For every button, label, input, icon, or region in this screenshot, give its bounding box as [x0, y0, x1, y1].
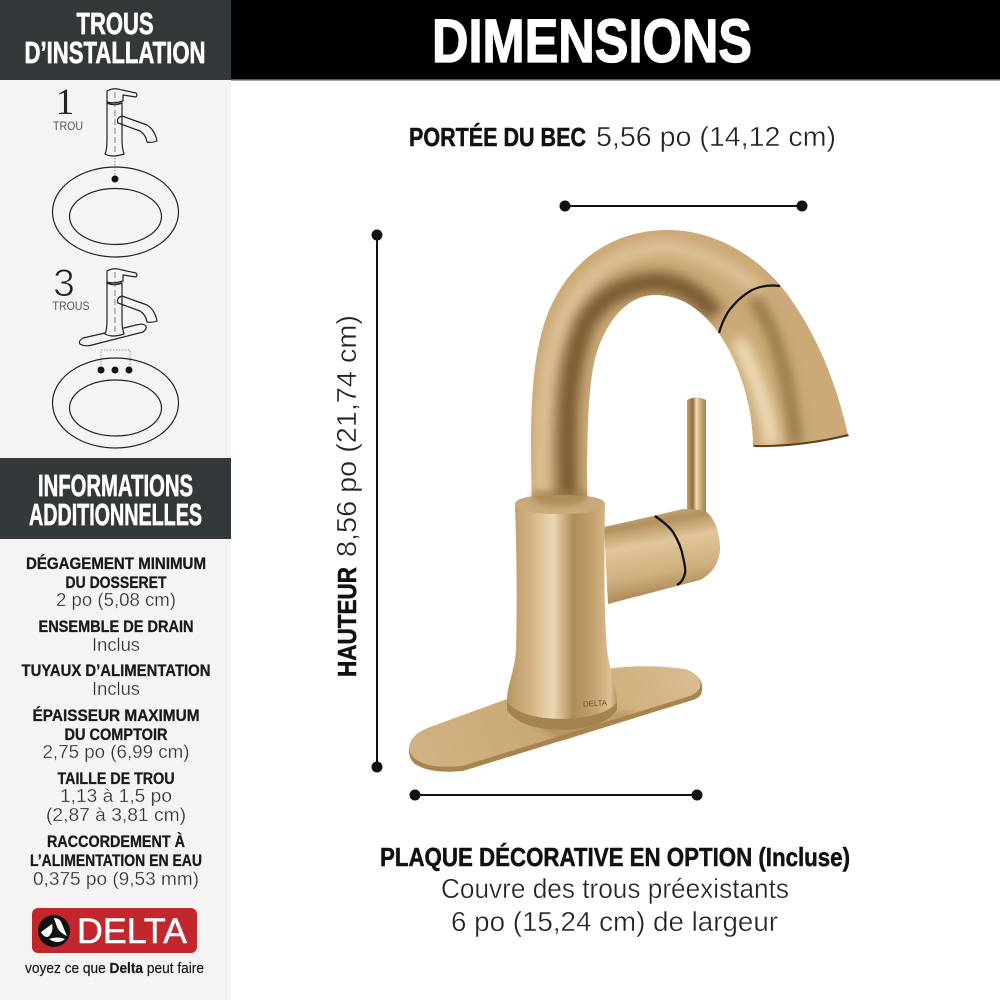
logo: Delta: DELTA	[77, 912, 188, 951]
text block: additional specifications: DU DOSSERET	[66, 574, 166, 592]
faucet: lever handle	[687, 398, 706, 518]
text block: additional specifications: DÉGAGEMENT MINIMUM	[26, 554, 206, 573]
heading: trous d'installation: TROUS	[76, 6, 154, 41]
text block: additional specifications: RACCORDEMENT À	[47, 832, 185, 851]
dimension line: deck plate width	[410, 790, 702, 800]
text block: additional specifications: Inclus	[92, 679, 140, 699]
illustration: faucet	[409, 230, 849, 772]
heading: dimensions banner	[231, 0, 1000, 80]
icon: three-hole installation: 3	[53, 262, 75, 305]
text: deck plate caption	[380, 842, 850, 937]
logo: Delta: voyez ce que Delta peut faire	[25, 961, 204, 977]
text block: additional specifications: 2 po (5,08 cm)	[56, 590, 176, 610]
text: height: 8,56 po (21,74 cm)	[331, 315, 362, 557]
heading: dimensions banner: DIMENSIONS	[432, 7, 752, 75]
logo: Delta	[25, 908, 204, 977]
text: spout reach: 5,56 po (14,12 cm)	[596, 121, 836, 152]
panel: left sidebar	[0, 0, 231, 1000]
icon: three-hole installation	[52, 262, 178, 448]
text block: additional specifications: ÉPAISSEUR MAXIMUM	[32, 706, 200, 725]
heading: informations additionnelles	[0, 458, 231, 539]
icon: one-hole installation: 1	[56, 82, 74, 123]
text: height: HAUTEUR	[332, 567, 362, 677]
heading: informations additionnelles: INFORMATIONS	[38, 468, 193, 503]
faucet: deck plate	[409, 666, 702, 772]
text block: additional specifications	[22, 554, 210, 889]
text: spout reach: PORTÉE DU BEC	[409, 122, 586, 152]
heading: trous d'installation	[0, 0, 231, 80]
text block: additional specifications: (2,87 à 3,81 cm)	[46, 805, 186, 825]
text: deck plate caption: Couvre des trous préexistants	[441, 873, 789, 904]
dimension line: height	[372, 230, 382, 772]
text: deck plate caption: 6 po (15,24 cm) de largeur	[451, 906, 778, 937]
text: spout reach	[409, 121, 836, 152]
text block: additional specifications: 0,375 po (9,53 mm)	[33, 869, 199, 889]
dimension line: spout reach	[560, 200, 808, 212]
text block: additional specifications: Inclus	[92, 635, 140, 655]
icon: three-hole installation: TROUS	[52, 299, 90, 313]
heading: trous d'installation: D’INSTALLATION	[24, 35, 206, 70]
text block: additional specifications: L’ALIMENTATION EN EAU	[30, 852, 202, 870]
text block: additional specifications: 2,75 po (6,99 cm)	[42, 742, 190, 762]
faucet: spout	[531, 230, 849, 505]
faucet: body	[507, 490, 617, 730]
text block: additional specifications: TUYAUX D’ALIMENTATION	[22, 662, 210, 680]
heading: informations additionnelles: ADDITIONNELLES	[29, 497, 202, 532]
faucet: brand mark: DELTA	[583, 698, 608, 709]
text: height	[331, 315, 362, 677]
text block: additional specifications: DU COMPTOIR	[64, 726, 168, 744]
text: deck plate caption: PLAQUE DÉCORATIVE EN OPTION (Incluse)	[380, 842, 850, 872]
text block: additional specifications: TAILLE DE TROU	[58, 770, 174, 788]
text block: additional specifications: 1,13 à 1,5 po	[60, 786, 172, 806]
text block: additional specifications: ENSEMBLE DE DRAIN	[38, 618, 194, 636]
faucet: handle cylinder	[604, 509, 720, 604]
icon: one-hole installation: TROU	[53, 119, 83, 133]
icon: one-hole installation	[52, 82, 178, 257]
